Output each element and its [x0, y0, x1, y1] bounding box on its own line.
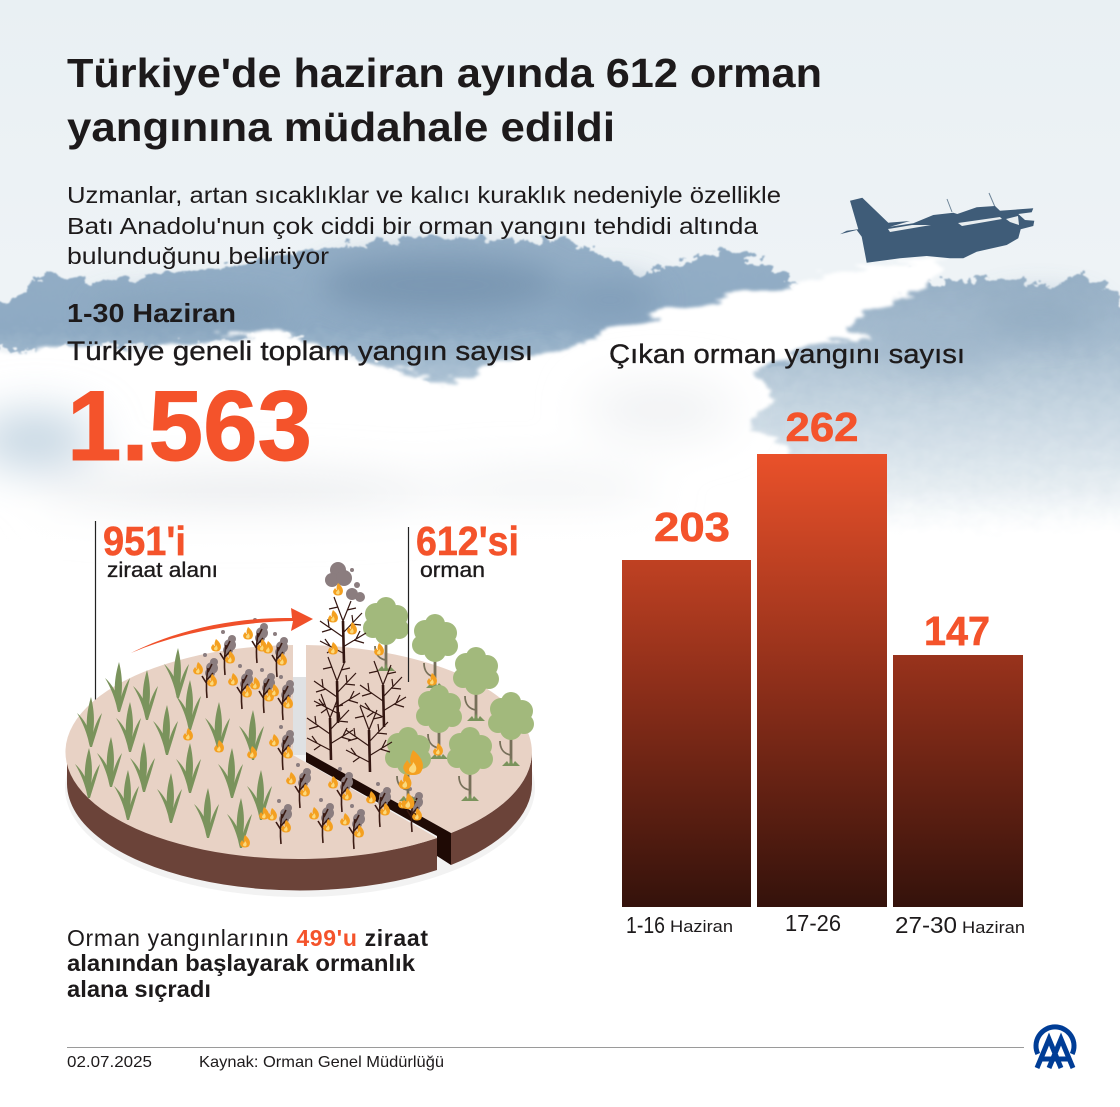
farmland count: 951'i	[103, 518, 186, 564]
background photo: sky, forest, water drop	[0, 0, 1120, 570]
intro text: Batı Anadolu'nun çok ciddi bir orman yangını tehdidi altında	[67, 213, 758, 239]
bar: 17-26	[757, 454, 887, 907]
spread caption: alanından başlayarak ormanlık	[67, 950, 415, 976]
grey haze in the cloud	[0, 386, 735, 511]
value labels: 203	[654, 504, 730, 550]
total fires number: 1.563	[67, 370, 312, 481]
flame	[399, 773, 411, 789]
forest right of water drop	[690, 270, 1120, 545]
arrow: spread to forest	[131, 608, 313, 653]
footer date and source	[67, 1054, 444, 1071]
category labels: Haziran	[962, 918, 1025, 937]
footer date and source: Kaynak: Orman Genel Müdürlüğü	[199, 1054, 444, 1071]
footer rule	[67, 1046, 1024, 1048]
intro text: bulunduğunu belirtiyor	[67, 243, 329, 269]
bar: 1-16 Haziran	[622, 560, 751, 907]
value labels: 262	[786, 404, 858, 450]
farmland surface	[65, 645, 437, 859]
bar chart	[622, 404, 1025, 938]
flame	[402, 793, 414, 809]
category labels: 1-16	[626, 912, 665, 938]
category labels	[626, 910, 1025, 938]
title: Türkiye'de haziran ayında 612 orman	[67, 50, 822, 96]
spread caption: alana sıçradı	[67, 976, 211, 1002]
intro text: Uzmanlar, artan sıcaklıklar ve kalıcı kuraklık nedeniyle özellikle	[67, 182, 781, 208]
farmland leader line	[94, 521, 96, 705]
category labels: Haziran	[670, 917, 733, 936]
farmland plants	[75, 648, 272, 848]
forest side	[451, 752, 532, 865]
pie illustration: farmland and forest	[65, 562, 535, 897]
category labels: 27-30	[895, 912, 957, 938]
footer date and source: 02.07.2025	[67, 1054, 152, 1071]
forest count: 612'si	[416, 518, 519, 564]
cut edge	[306, 752, 451, 865]
white water cloud	[0, 256, 950, 570]
darker foliage	[90, 257, 1100, 369]
intro text	[67, 182, 781, 269]
title	[67, 50, 822, 150]
farmland side	[67, 752, 437, 890]
farmland count: ziraat alanı	[107, 559, 218, 582]
forest count	[416, 518, 519, 582]
value labels	[654, 404, 990, 654]
spread caption: Orman yangınlarının 499'u ziraat	[67, 925, 428, 951]
burning saplings	[193, 618, 423, 849]
title: yangınına müdahale edildi	[67, 104, 615, 150]
chart heading: Çıkan orman yangını sayısı	[609, 339, 965, 369]
forest surface	[306, 645, 532, 833]
forest leader line	[408, 527, 410, 682]
forest left treeline	[0, 236, 800, 400]
date range heading: 1-30 Haziran	[67, 298, 236, 328]
total fires heading: Türkiye geneli toplam yangın sayısı	[67, 336, 533, 366]
value labels: 147	[924, 608, 990, 654]
central gap wall	[293, 677, 306, 755]
dead trees	[307, 657, 406, 772]
bar: 27-30 Haziran	[893, 655, 1023, 907]
farmland count	[103, 518, 218, 582]
spreading flames	[403, 750, 423, 775]
green trees	[363, 597, 534, 801]
forest count: orman	[420, 559, 485, 582]
plane	[840, 193, 1034, 263]
category labels: 17-26	[785, 910, 841, 936]
AA logo	[1036, 1027, 1074, 1068]
pie shadow	[65, 679, 535, 897]
spread caption	[67, 925, 428, 1002]
burning tree with smoke	[320, 562, 366, 663]
